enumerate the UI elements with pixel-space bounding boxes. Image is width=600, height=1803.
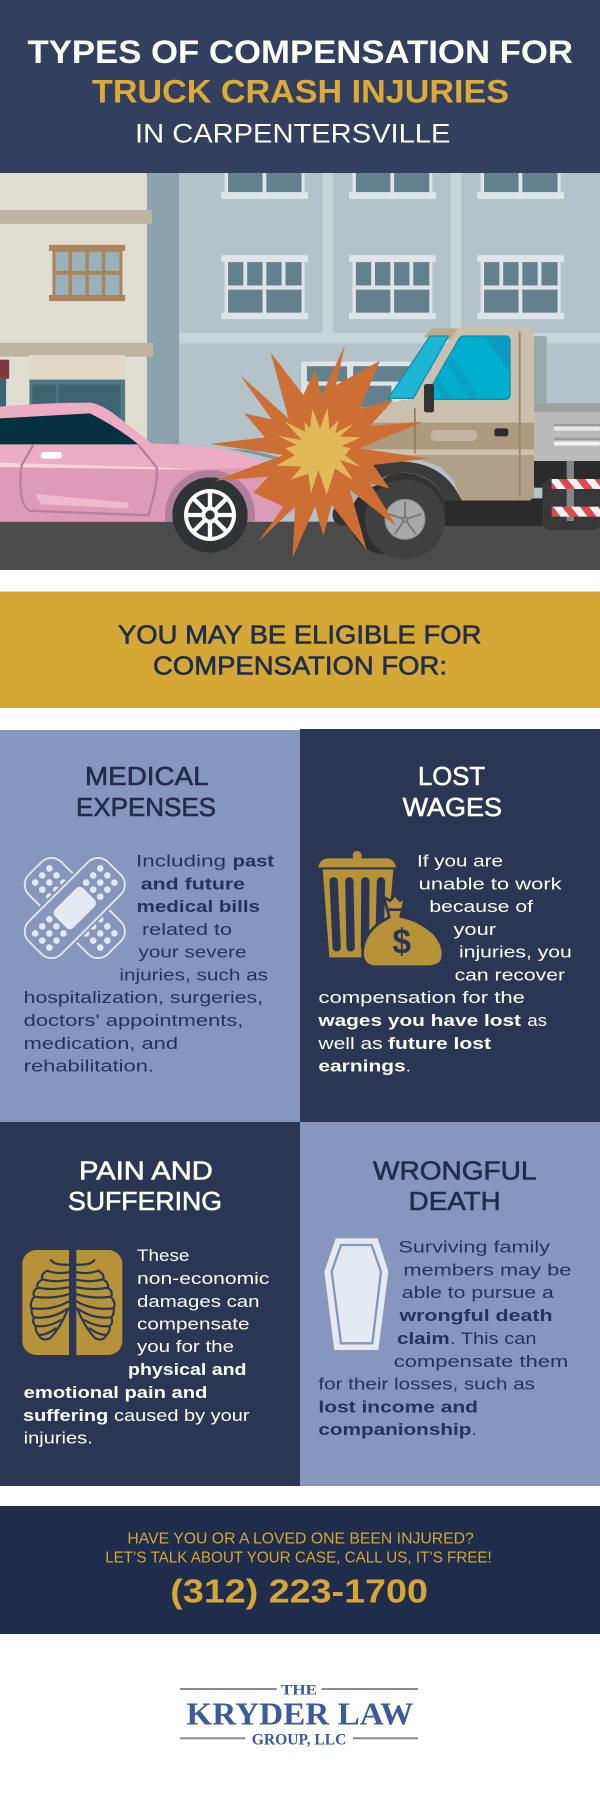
buildings [0,173,600,464]
title: TYPES OF COMPENSATION FOR [28,34,573,70]
text: medical expenses [24,852,274,1076]
text: pain and suffering [23,1246,270,1448]
text: pain and suffering: caused by your [114,1406,250,1425]
text: wrongful death: . This can [450,1329,536,1348]
explosion [210,345,428,557]
call to action text [105,1530,492,1566]
call to action footer [0,1506,600,1634]
text: lost wages: If you are [417,852,503,870]
text: lost wages: well as [317,1034,383,1053]
heading: wrongful death: DEATH [409,1186,501,1216]
panel: pain and suffering [0,1122,300,1486]
text: medical expenses: medical bills [137,897,260,916]
heading: wrongful death [373,1155,536,1216]
panel: lost wages [300,729,600,1122]
text: medical expenses: rehabilitation. [24,1056,154,1076]
text: medical expenses: your severe [138,943,246,962]
text: wrongful death [318,1238,571,1439]
call to action text: LET’S TALK ABOUT YOUR CASE, CALL US, IT’S FREE! [105,1549,492,1566]
text: pain and suffering: These [137,1246,189,1265]
title [28,34,573,148]
panel: medical expenses [0,730,300,1122]
phone number: (312) 223-1700 [170,1573,428,1610]
logo: The Kryder Law Group [180,1682,418,1748]
text: lost wages: unable to work [419,874,562,893]
text: wrongful death: able to pursue a [402,1283,554,1302]
logo: The Kryder Law Group: THE [281,1682,317,1698]
text: wrongful death: lost income and [318,1398,478,1416]
text: medical expenses: doctors' appointments, [24,1011,243,1030]
text: wrongful death: Surviving family [398,1238,551,1257]
banner heading: YOU MAY BE ELIGIBLE FOR [118,620,481,650]
text: lost wages: wages you have lost [317,1011,521,1030]
illustration: truck crashing into car [0,173,600,570]
text: wrongful death: claim [397,1329,450,1348]
heading: pain and suffering [68,1155,222,1216]
text: pain and suffering: suffering [23,1406,108,1425]
heading: lost wages [403,761,502,822]
icon: coffin [324,1238,388,1350]
panel: wrongful death [300,1122,600,1486]
text: lost wages [317,852,572,1076]
car [0,403,300,560]
text: pain and suffering: compensate [137,1314,250,1334]
text: pain and suffering: damages can [137,1292,260,1311]
text: lost wages: compensation for the [318,988,525,1007]
text: wrongful death: members may be [403,1260,571,1280]
text: medical expenses: Including [136,852,226,870]
text: lost wages: as [527,1011,547,1030]
car wheel [165,470,255,560]
heading: wrongful death: WRONGFUL [373,1155,536,1185]
banner heading [118,620,481,681]
logo: The Kryder Law Group: KRYDER LAW [186,1695,413,1731]
text: lost wages: earnings [318,1056,406,1076]
text: pain and suffering: you for the [137,1337,234,1356]
text: pain and suffering: physical and [128,1360,246,1379]
text: lost wages: injuries, you [459,943,572,962]
icon: bandages [19,852,131,964]
text: pain and suffering: non-economic [137,1269,270,1288]
text: medical expenses: related to [142,920,232,939]
header panel [0,0,600,173]
heading: pain and suffering: PAIN AND [79,1155,213,1185]
banner heading: COMPENSATION FOR: [153,651,447,681]
road [0,522,600,570]
text: wrongful death: companionship [318,1420,471,1439]
logo: The Kryder Law Group: GROUP, LLC [252,1731,346,1748]
text: lost wages: future lost [388,1034,491,1053]
text: wrongful death: wrongful death [398,1306,552,1325]
heading: medical expenses: MEDICAL [85,761,209,791]
heading: pain and suffering: SUFFERING [68,1186,222,1216]
title: TRUCK CRASH INJURIES [92,74,509,110]
eligibility banner [0,592,600,708]
text: wrongful death: for their losses, such as [318,1375,535,1394]
title: IN CARPENTERSVILLE [135,118,450,148]
text: lost wages: . [406,1056,411,1076]
truck [333,325,600,559]
heading: lost wages: WAGES [403,792,502,822]
text: pain and suffering: injuries. [24,1428,93,1448]
heading: lost wages: LOST [418,761,485,791]
text: medical expenses: injuries, such as [119,965,268,984]
barrier stripes [552,479,600,517]
truck cab [353,325,537,502]
heading: medical expenses [76,761,216,822]
call to action text: HAVE YOU OR A LOVED ONE BEEN INJURED? [127,1530,474,1547]
icon: trash can and money bag: $ [392,922,411,961]
text: lost wages: can recover [455,965,565,984]
icon: rib cage [22,1250,122,1355]
text: lost wages: because of [429,897,533,916]
text: medical expenses: past [233,852,274,870]
truck wheels [333,462,462,559]
text: lost wages: your [454,920,496,939]
text: wrongful death: compensate them [394,1352,568,1371]
text: medical expenses: medication, and [24,1034,178,1053]
text: medical expenses: hospitalization, surgeries, [24,988,263,1007]
text: wrongful death: . [472,1420,477,1439]
icon: trash can and money bag [318,851,443,967]
text: medical expenses: and future [141,874,245,893]
text: pain and suffering: emotional pain and [24,1383,207,1402]
heading: medical expenses: EXPENSES [76,792,216,822]
